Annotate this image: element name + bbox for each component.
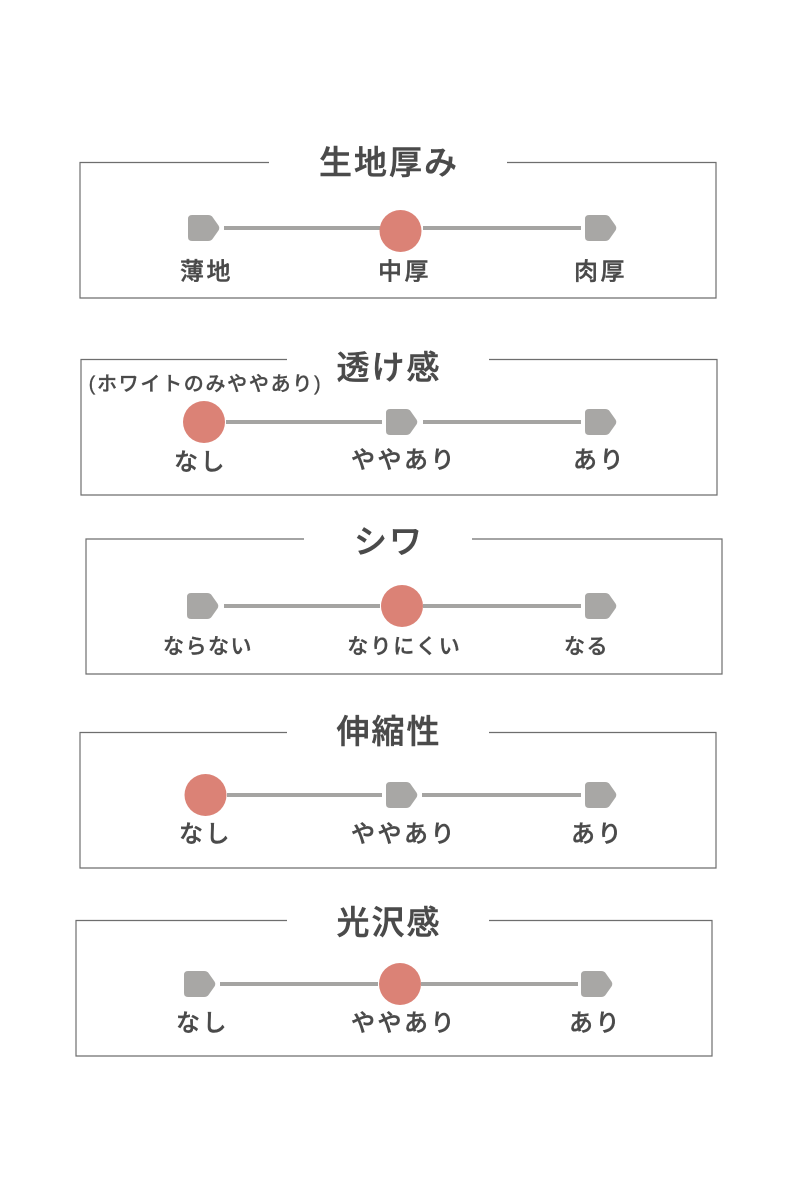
panel frame <box>86 539 722 674</box>
scale: なし to あり <box>184 963 612 1005</box>
heading: 光沢感: 光沢感 <box>336 904 442 941</box>
panel: 透け感 <box>81 349 717 495</box>
labels: なし <box>174 449 227 476</box>
labels: ややあり <box>351 447 457 474</box>
labels <box>180 258 627 286</box>
labels: 薄地 <box>180 258 233 286</box>
heading: 透け感: 透け感 <box>336 349 442 386</box>
note: ホワイトのみややあり: (ホワイトのみややあり) <box>89 372 322 396</box>
labels: ならない <box>163 636 253 658</box>
labels: なし <box>176 1010 229 1037</box>
labels <box>163 636 609 658</box>
labels <box>179 821 624 848</box>
labels: ややあり <box>351 1010 457 1037</box>
scale: なし to あり <box>184 774 616 816</box>
heading: 生地厚み: 生地厚み <box>319 144 459 181</box>
labels <box>176 1010 622 1037</box>
labels: なりにくい <box>347 636 462 658</box>
scale: 薄地 to 肉厚 <box>188 210 616 252</box>
labels: あり <box>569 1010 622 1037</box>
panel frame <box>76 920 712 1056</box>
panel: 光沢感 <box>76 904 712 1056</box>
scale: なし to あり <box>183 401 616 443</box>
panel: 伸縮性 <box>80 713 716 868</box>
labels: ややあり <box>351 821 457 848</box>
panel frame <box>81 360 717 495</box>
labels: なる <box>564 636 609 658</box>
heading: 伸縮性: 伸縮性 <box>336 713 442 750</box>
panel: シワ <box>86 523 722 674</box>
panel frame <box>80 732 716 868</box>
labels: なし <box>179 821 232 848</box>
scale: ならない to なる <box>187 585 616 627</box>
labels: 中厚 <box>378 258 431 286</box>
panel frame <box>80 162 716 298</box>
panel: 生地厚み <box>80 144 716 298</box>
labels <box>174 447 626 476</box>
labels: あり <box>571 821 624 848</box>
labels: あり <box>573 447 626 474</box>
heading: シワ: シワ <box>354 523 424 560</box>
labels: 肉厚 <box>574 258 627 286</box>
